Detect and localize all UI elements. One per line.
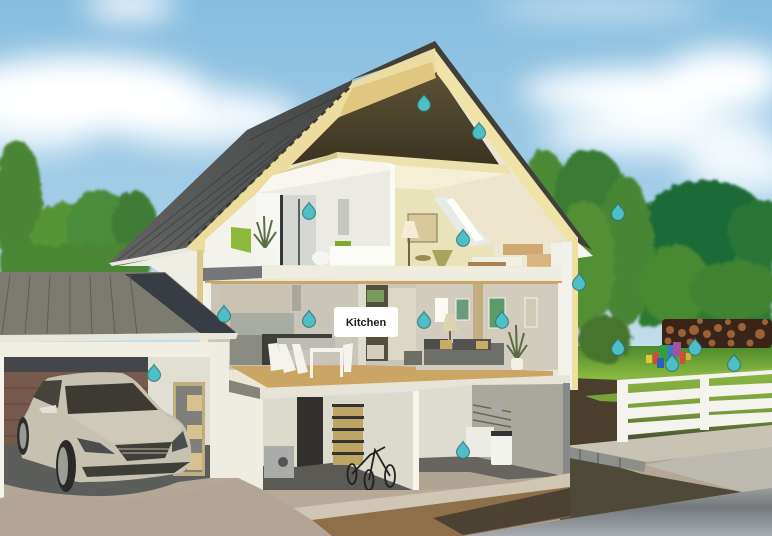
upper floor: bathroom <box>205 158 390 275</box>
garage wall <box>0 342 263 500</box>
basement <box>263 384 563 490</box>
grass patch <box>585 393 620 402</box>
clouds <box>0 0 772 194</box>
side table <box>415 255 431 261</box>
house silhouette backing <box>190 50 578 392</box>
pillar <box>413 391 419 490</box>
driveway left edge <box>0 478 332 536</box>
trees: right <box>521 150 772 330</box>
water heater <box>466 427 512 465</box>
callout: Kitchen: Kitchen <box>346 317 386 329</box>
road <box>460 488 772 536</box>
living room <box>404 283 564 376</box>
dining set <box>268 343 353 378</box>
skylight <box>433 197 492 247</box>
driveway ground <box>0 470 572 536</box>
plant <box>254 216 276 248</box>
pavement <box>564 425 772 472</box>
white wall end <box>203 283 211 311</box>
wall rack <box>473 405 511 427</box>
floor <box>263 462 413 490</box>
shelving rack <box>332 404 364 465</box>
roof front fascia <box>338 48 440 118</box>
upper floor slab <box>203 265 570 285</box>
step and gravel <box>263 473 570 536</box>
main floor slab <box>229 375 570 399</box>
trees: left <box>0 140 157 278</box>
bed <box>472 257 522 266</box>
kitchen <box>220 284 416 371</box>
boxes <box>503 244 543 255</box>
sofa <box>404 339 504 365</box>
shrub <box>578 315 632 363</box>
gable wall outside left <box>118 251 205 305</box>
yellow stud <box>197 250 203 305</box>
green wall art <box>231 227 251 253</box>
roof: shingled slope <box>109 41 592 266</box>
road far side <box>645 440 772 492</box>
storage shelf <box>173 382 205 476</box>
grass and soil behind fence <box>617 368 772 446</box>
washer <box>264 446 294 478</box>
water drop markers <box>148 94 740 458</box>
colourful toys on lawn <box>646 342 691 368</box>
garage interior <box>4 357 210 496</box>
upper floor: bedroom <box>273 152 570 270</box>
toilet <box>312 251 330 265</box>
floor lamp <box>401 221 419 266</box>
chair <box>432 250 453 266</box>
wood floor <box>230 365 553 388</box>
excavated soil under pavement <box>560 450 742 521</box>
callout: Kitchen <box>334 307 398 337</box>
basement outer wall <box>563 383 570 486</box>
soil beside house <box>570 378 620 452</box>
garage roof <box>0 272 238 342</box>
plant pot <box>255 248 276 266</box>
wall art <box>408 214 437 242</box>
eave end right <box>572 237 593 259</box>
main floor back wall <box>208 284 562 370</box>
bathtub <box>330 246 390 266</box>
lawn <box>572 346 772 380</box>
attic interior <box>283 72 500 167</box>
bicycle <box>348 447 395 490</box>
rafter left <box>186 84 352 254</box>
top beam <box>337 62 436 118</box>
column <box>358 284 366 371</box>
sky background <box>0 0 772 400</box>
lamp <box>442 314 458 349</box>
car <box>17 372 191 492</box>
exterior right wall <box>562 237 578 389</box>
fence <box>617 370 772 442</box>
shelving alcove <box>366 285 388 361</box>
potted plant <box>507 325 527 370</box>
ball <box>491 401 503 413</box>
log pile <box>662 318 772 348</box>
rafter right <box>434 50 578 246</box>
